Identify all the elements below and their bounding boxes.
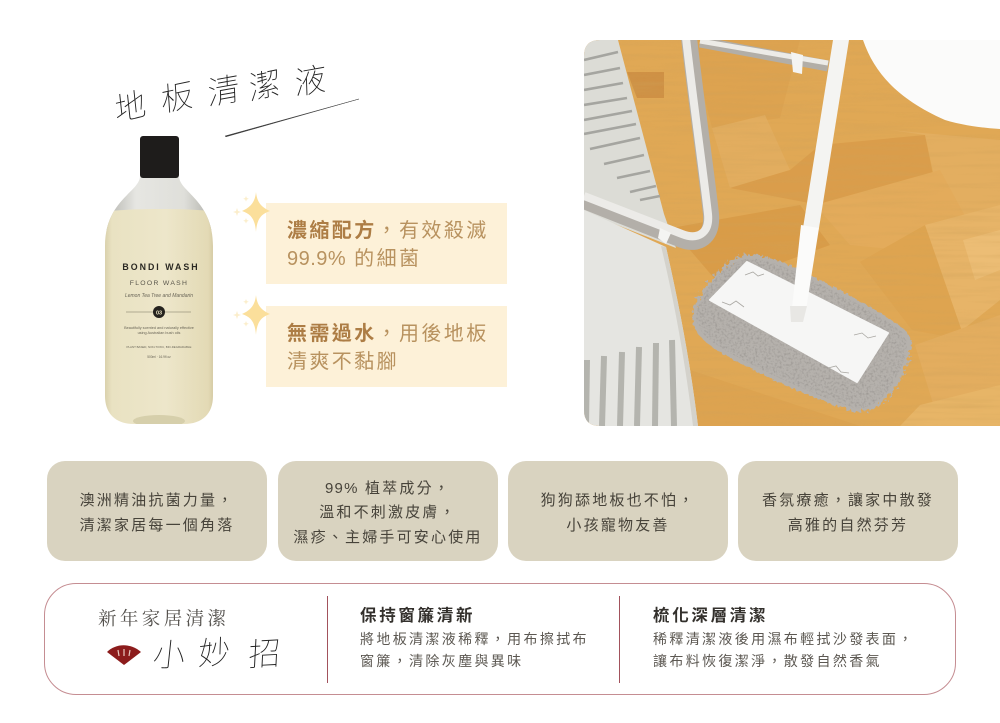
divider	[619, 596, 620, 683]
benefit card: plant based	[278, 461, 498, 561]
feature box: no rinse: 清爽不黏腳	[287, 350, 399, 372]
table top	[863, 40, 1000, 129]
tip: sofa: 稀釋清潔液後用濕布輕拭沙發表面，	[653, 631, 915, 647]
handwritten tips title: 妙	[198, 634, 231, 672]
chair clips	[658, 52, 803, 244]
feature box: concentrated formula: 濃縮配方，有效殺滅	[287, 220, 489, 242]
benefit card: pet safe: 小孩寵物友善	[566, 516, 670, 534]
benefit card: antibacterial	[47, 461, 267, 561]
feature box: no rinse: 無需過水，用後地板	[287, 323, 489, 345]
tip: curtains	[360, 606, 589, 669]
handwritten title: 地	[113, 85, 148, 129]
wood grain	[959, 274, 982, 408]
panel: tips	[44, 583, 956, 695]
divider	[327, 596, 328, 683]
icon: sparkle one	[234, 192, 270, 232]
upper rug	[584, 40, 676, 248]
tip: sofa	[653, 606, 915, 669]
bottle shoulder	[106, 176, 212, 230]
wood floor	[584, 40, 1000, 426]
benefit card: pet safe: 狗狗舔地板也不怕，	[541, 492, 695, 509]
benefit card: antibacterial: 澳洲精油抗菌力量，	[80, 492, 234, 509]
handwritten title: 潔	[248, 64, 282, 107]
handwritten title: 清	[207, 70, 240, 112]
label text: 500ml · 16.9fl oz	[147, 355, 171, 359]
tips heading: 新年家居清潔	[98, 610, 229, 630]
bottle base	[133, 415, 185, 424]
benefit card: aromatherapy	[738, 461, 958, 561]
benefit card: aromatherapy: 香氛療癒，讓家中散發	[762, 492, 934, 509]
benefit card: aromatherapy: 高雅的自然芬芳	[788, 516, 908, 534]
benefit card: plant based: 溫和不刺激皮膚，	[319, 504, 457, 521]
tip: curtains: 窗簾，清除灰塵與異味	[360, 653, 524, 669]
label text: FLOOR WASH	[130, 280, 188, 287]
label text: BONDI WASH	[122, 262, 200, 272]
handwritten tips title	[151, 634, 281, 673]
handwritten title	[113, 60, 359, 137]
handwritten tips title: 招	[248, 635, 281, 673]
icon: red fan	[107, 645, 141, 665]
product bottle	[105, 136, 213, 424]
feature box: concentrated formula: 99.9% 的細菌	[287, 248, 421, 270]
icon: sparkle two	[234, 296, 270, 334]
mop handle	[803, 40, 849, 228]
photo: mop on wooden floor	[584, 40, 1000, 426]
tip: sofa: 讓布料恢復潔淨，散發自然香氣	[653, 653, 882, 669]
label text: using Australian bush oils	[138, 331, 181, 335]
tip: curtains: 將地板清潔液稀釋，用布擦拭布	[360, 631, 589, 647]
benefit card: pet safe	[508, 461, 728, 561]
cap	[140, 136, 179, 178]
chair frame	[584, 38, 828, 242]
lower rug	[584, 210, 698, 426]
label text: Lemon Tea Tree and Mandarin	[125, 293, 193, 299]
tip: sofa: 梳化深層清潔	[653, 607, 768, 625]
label text: 03	[156, 310, 162, 316]
mop plate	[710, 262, 888, 382]
label text: PLANT BASED, NON-TOXIC, BIO-DEGRADABLE	[127, 345, 192, 349]
tip: curtains: 保持窗簾清新	[360, 607, 475, 625]
label text	[122, 262, 200, 359]
bottle liquid	[105, 209, 213, 424]
label text: Beautifully scented and naturally effective	[124, 326, 194, 330]
handwritten title: 液	[294, 60, 327, 102]
benefit card: plant based: 濕疹、主婦手可安心使用	[293, 529, 483, 546]
handwritten title: 板	[160, 76, 194, 119]
handwritten tips title: 小	[151, 637, 187, 673]
feature box: concentrated formula	[266, 203, 507, 284]
mop pad	[692, 255, 911, 412]
mop pad texture	[696, 259, 907, 408]
benefit card: plant based: 99% 植萃成分，	[325, 480, 451, 497]
feature box: no rinse	[266, 306, 507, 387]
benefit card: antibacterial: 清潔家居每一個角落	[80, 516, 234, 534]
